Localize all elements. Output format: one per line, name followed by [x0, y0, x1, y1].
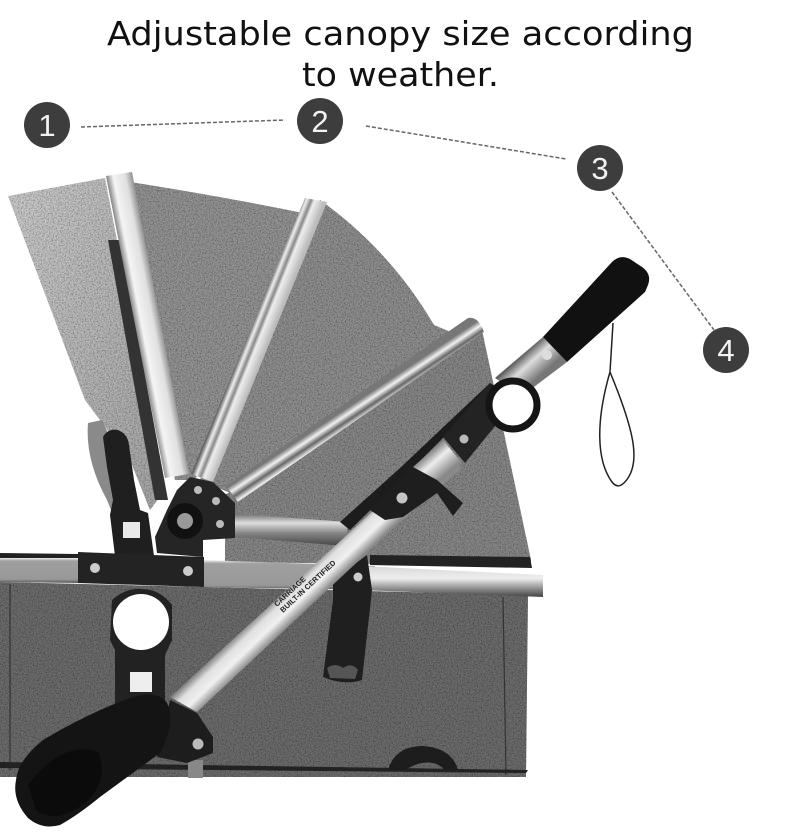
arm window: [123, 522, 140, 538]
rail left: [0, 558, 80, 583]
title: Adjustable canopy size according: [107, 14, 694, 53]
handle ring: [489, 381, 537, 429]
shadow strip above handle: [340, 383, 495, 530]
canopy bar: [225, 513, 348, 546]
lower pivot: [157, 700, 213, 763]
title: [107, 14, 694, 94]
canopy panel: front: [225, 330, 531, 566]
handle sleeve: [443, 383, 500, 463]
seam above rail: [0, 553, 532, 568]
stroller illustration: [0, 172, 649, 826]
canopy rib 3: [226, 318, 484, 502]
upper handle tube: [495, 337, 567, 396]
number badge 2: [297, 98, 343, 144]
canopy panel: second: [130, 182, 308, 480]
rail bracket: [78, 552, 204, 587]
number badge 1: [24, 102, 70, 148]
seat cushion: [88, 420, 125, 520]
wheel post: [188, 760, 203, 778]
basket pocket arch: [388, 746, 458, 770]
number badge 3: 3: [591, 151, 609, 186]
rail right: [360, 566, 543, 597]
canopy rib 2: [191, 198, 327, 482]
rear hinge arm: [103, 430, 154, 556]
number badge 4: 4: [717, 333, 735, 368]
hook bracket: [370, 467, 463, 520]
number badge 1: 1: [38, 108, 56, 143]
wrist strap: [600, 323, 634, 486]
canopy hinge: [155, 477, 235, 557]
foot pedal: [15, 695, 170, 826]
handle grip: [543, 257, 649, 362]
rail middle: [200, 560, 375, 590]
basket seams: [10, 584, 506, 775]
title: to weather.: [302, 55, 499, 94]
handle label text: BUILT-IN CERTIFIED: [278, 558, 338, 614]
canopy rib 1: [106, 172, 189, 478]
number badge 2: 2: [311, 104, 329, 139]
number badge 4: [703, 327, 749, 373]
dashed connector lines: [81, 120, 714, 330]
canopy panel: third: [200, 200, 470, 495]
canopy rib shadow: [108, 240, 168, 500]
handle label text: CARRIAGE: [272, 575, 308, 608]
number badge 3: [577, 145, 623, 191]
leather strap: [323, 555, 372, 682]
handle tube lower: [170, 448, 462, 712]
vertical bracket with round hole: [110, 589, 172, 710]
basket bottom band: [0, 762, 528, 773]
basket body: [0, 582, 528, 777]
canopy panel: rear: [8, 178, 165, 510]
handle mid section: [413, 440, 462, 490]
